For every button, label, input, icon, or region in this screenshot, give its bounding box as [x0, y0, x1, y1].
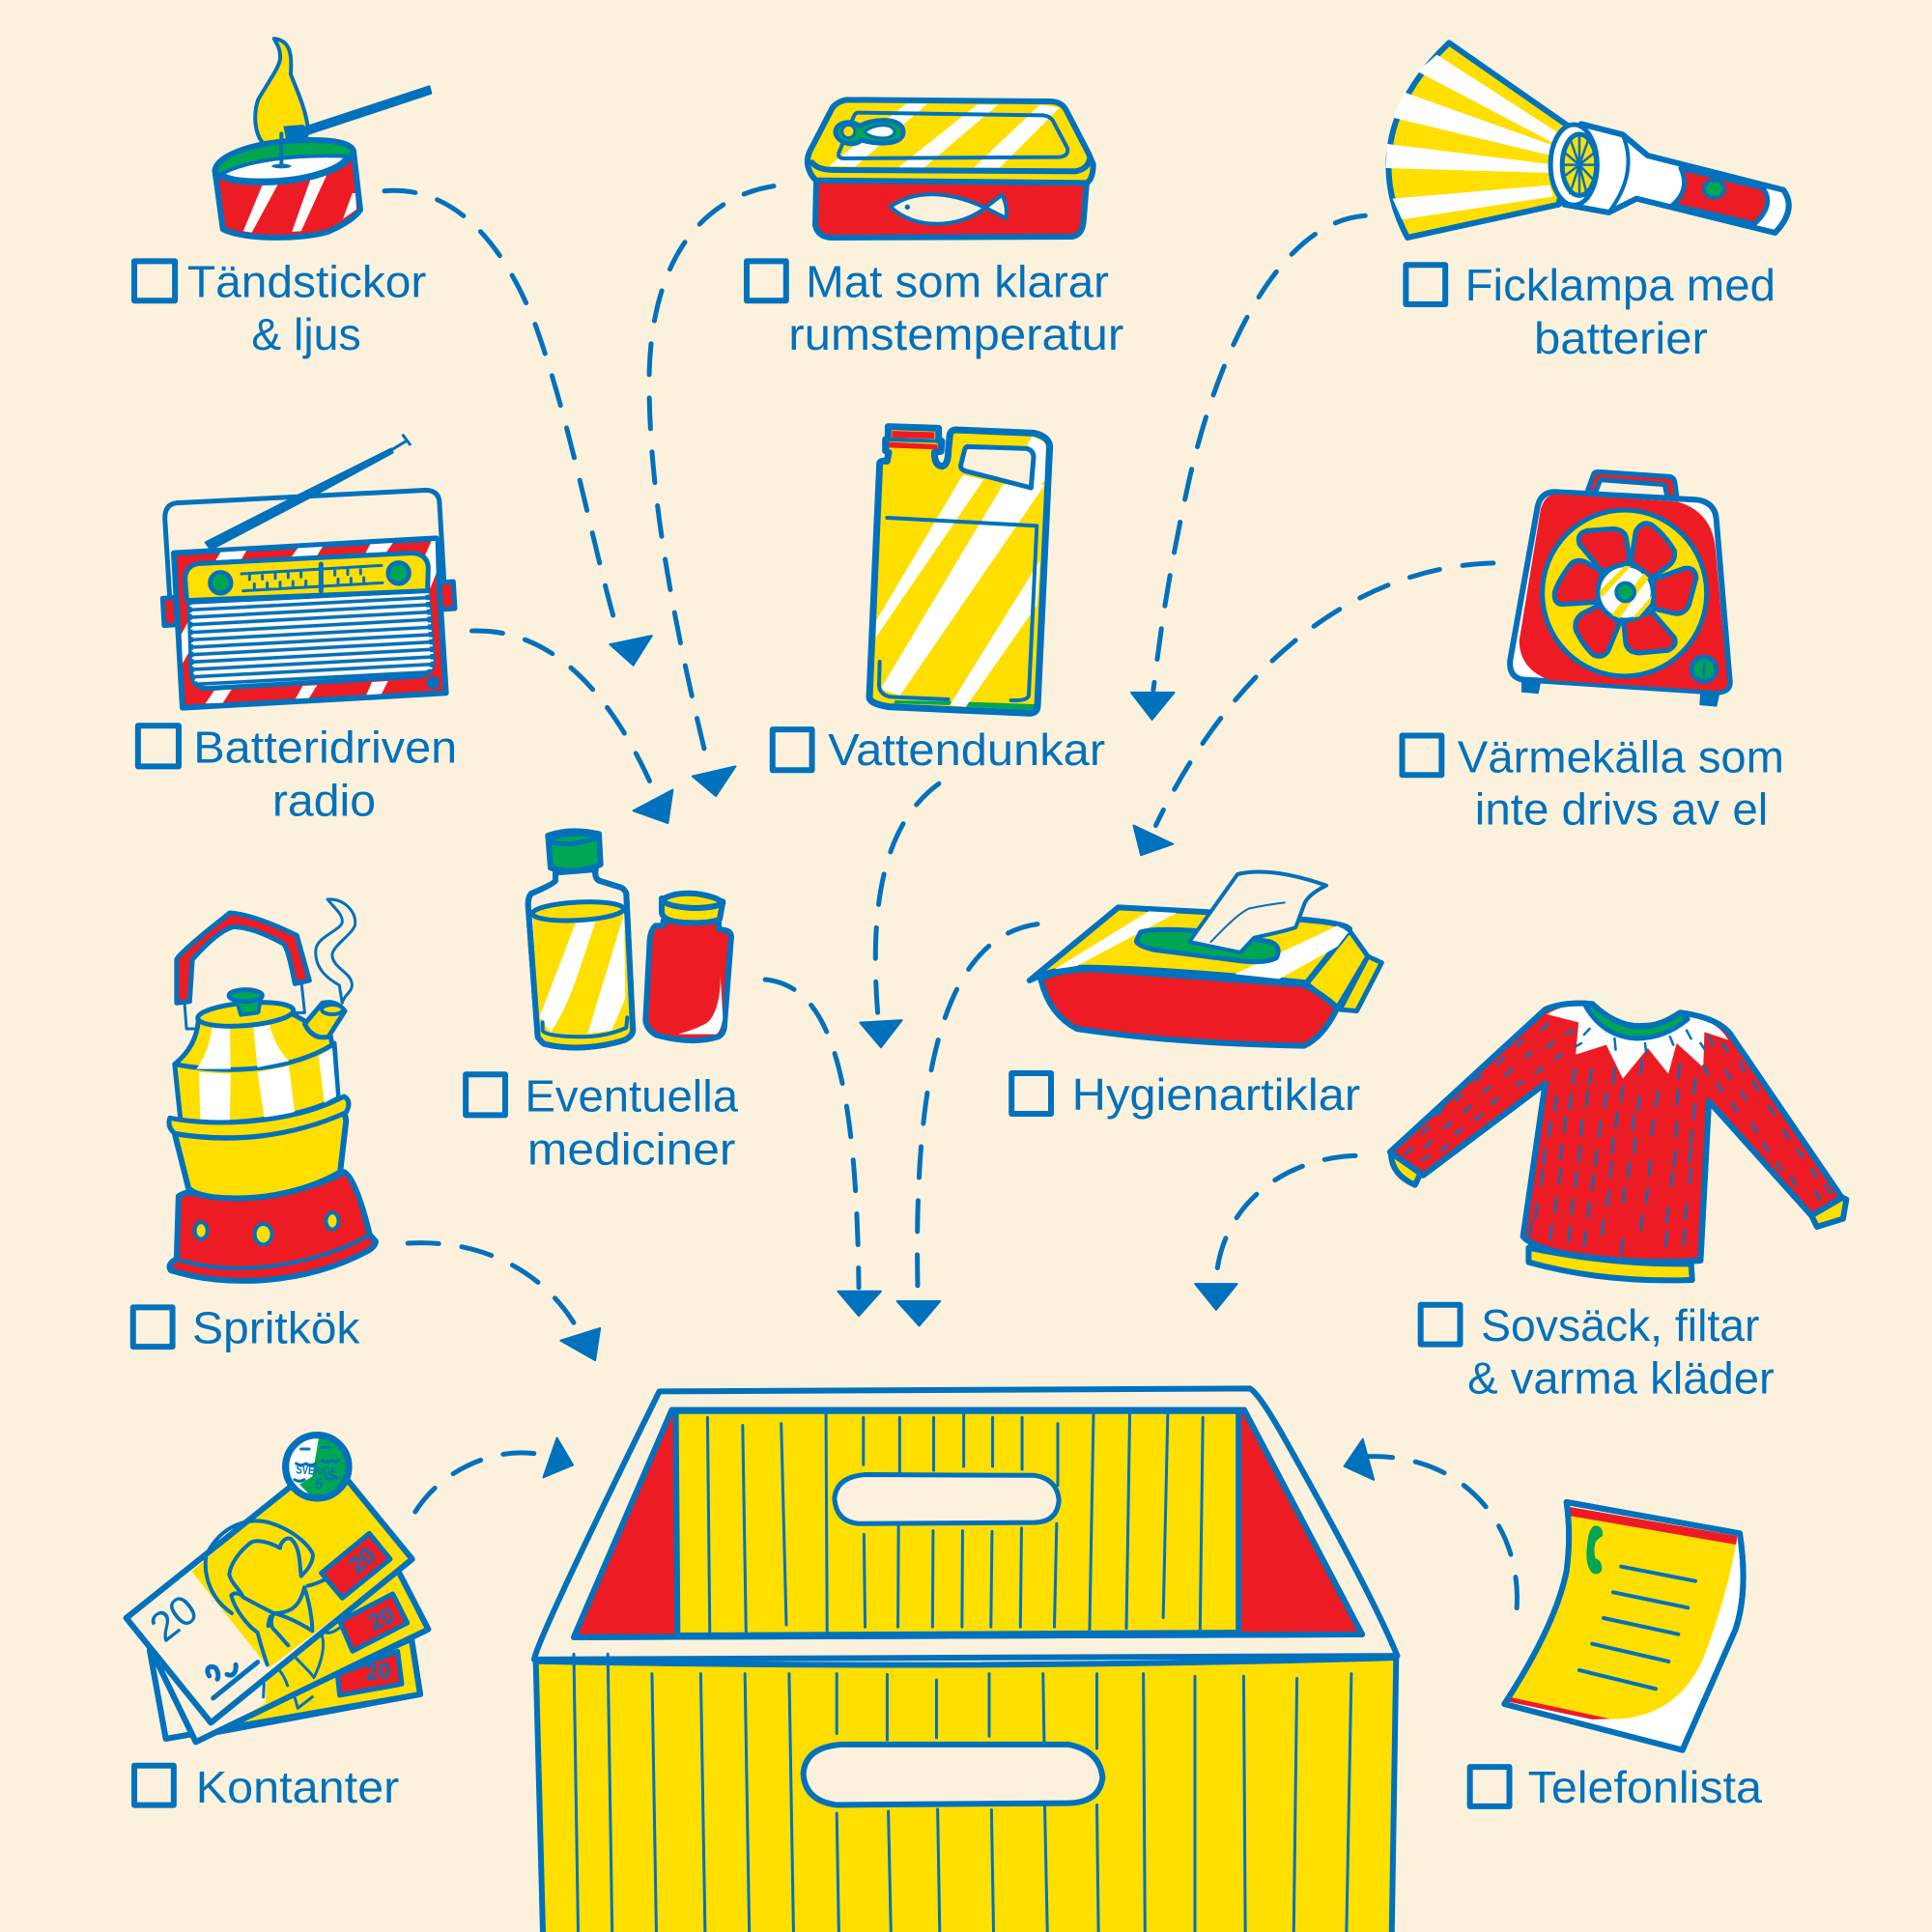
- label: sleeping bag: & varma kläder: [1467, 1353, 1775, 1404]
- arrow: stove to box: [408, 1243, 600, 1360]
- icon: banknotes and coin: 20: [364, 1658, 392, 1685]
- label: medicine: mediciner: [527, 1123, 735, 1174]
- label: hygiene: Hygienartiklar: [1072, 1069, 1360, 1120]
- icon: water canister: [869, 427, 1050, 713]
- label: water: Vattendunkar: [828, 724, 1105, 775]
- arrow: cash to box: [415, 1438, 573, 1512]
- label: flashlight: Ficklampa med: [1465, 260, 1776, 310]
- label: sleeping bag: Sovsäck, filtar: [1481, 1300, 1759, 1350]
- label: heat source: [1403, 732, 1784, 834]
- label: medicine: Eventuella: [525, 1071, 739, 1122]
- icon: sardine can: [808, 99, 1094, 238]
- icon: banknotes and coin: 20: [142, 1586, 207, 1652]
- icon: banknotes and coin: 20: [365, 1602, 398, 1635]
- icon: phone list: [1504, 1502, 1744, 1750]
- label: food: [747, 256, 1123, 359]
- icon: banknotes and coin: [127, 1435, 428, 1742]
- icon: banknotes and coin: 20: [344, 1543, 381, 1579]
- icon: banknotes and coin: SVERIGE: [296, 1463, 337, 1479]
- label: radio: radio: [272, 775, 376, 825]
- label: matches and candles: Tändstickor: [187, 256, 426, 306]
- icon: medicine bottle and jar: [528, 831, 731, 1047]
- label: medicine: [466, 1071, 739, 1174]
- arrow: heater to hygiene: [1133, 563, 1493, 855]
- arrow: phone list to box: [1345, 1439, 1517, 1608]
- label: phone list: Telefonlista: [1528, 1762, 1762, 1812]
- label: heat source: inte drivs av el: [1475, 783, 1768, 834]
- icon: spirit stove with kettle: [169, 899, 376, 1281]
- icon: candle and match: [214, 39, 431, 238]
- icon: tissue box: [1030, 872, 1381, 1046]
- label: food: Mat som klarar: [806, 256, 1109, 306]
- arrow: sweater to box: [1195, 1155, 1355, 1310]
- icon: banknotes and coin: 5: [315, 1477, 324, 1493]
- label: radio: [138, 723, 457, 825]
- arrow: medicine to box: [765, 980, 881, 1316]
- label: flashlight: batterier: [1534, 313, 1708, 363]
- label: sleeping bag: [1421, 1300, 1775, 1404]
- icon: sweater: [1390, 1004, 1846, 1280]
- arrow: radio to medicine: [472, 631, 672, 823]
- arrow: hygiene to box: [897, 924, 1037, 1325]
- icon: heater: [1510, 471, 1730, 707]
- icon: flashlight: [1386, 43, 1789, 238]
- icon: storage box: [534, 1388, 1397, 1932]
- label: stove: Spritkök: [192, 1302, 361, 1352]
- arrow: flashlight to hygiene: [1131, 215, 1365, 720]
- label: cash: Kontanter: [196, 1762, 399, 1812]
- label: flashlight: [1406, 260, 1776, 363]
- icon: battery radio: [162, 436, 455, 708]
- label: matches and candles: & ljus: [251, 309, 361, 359]
- label: radio: Batteridriven: [193, 723, 457, 773]
- arrow: can to medicine: [649, 186, 774, 796]
- label: matches and candles: [134, 256, 426, 359]
- arrow: water to centre: [860, 783, 939, 1047]
- label: food: rumstemperatur: [788, 309, 1123, 359]
- arrow: candle to medicine: [384, 190, 652, 666]
- label: heat source: Värmekälla som: [1458, 732, 1784, 782]
